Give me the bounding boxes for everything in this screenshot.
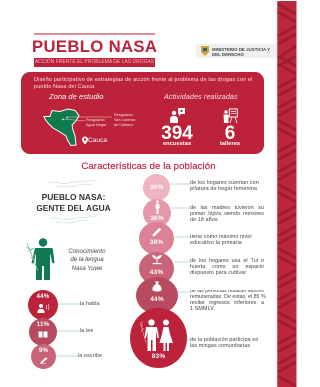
text: 38%: tiene como máximo nivel (190, 234, 252, 240)
ministry name: MINISTERIO DE JUSTICIA Y (212, 46, 270, 52)
label: San Lorenzo (114, 112, 136, 126)
heading: people of water: GENTE DEL AGUA (36, 203, 111, 213)
icon: money bag (152, 282, 162, 292)
circle: female-headed 30% (143, 174, 170, 201)
subtitle band: ACCIÓN FRENTE EL PROBLEMA DE LAS DROGAS (35, 59, 154, 65)
workshops label: talleres (220, 140, 240, 146)
icon: pencil (40, 357, 48, 364)
map of Cauca (43, 108, 80, 146)
text: 43% (190, 258, 264, 270)
label: Agua Negra (86, 118, 106, 127)
circle: primary education 38% (139, 222, 174, 255)
circle: speaks 44% (28, 290, 58, 320)
icon: book (38, 332, 48, 338)
text: 43%: huerta como un espacio (190, 264, 264, 270)
text: 44% continued: recibe ingresos inferiores a (190, 300, 264, 306)
value: 44% (150, 296, 164, 303)
heading: study zone: Zona de estudio (49, 92, 103, 101)
text: 43%: de los hogares usa el Tul o (190, 258, 264, 264)
text: 83%: de la población participa en (190, 337, 258, 343)
label: San Lorenzo: San Lorenzo (114, 118, 136, 122)
text: 30%: jefatura de hogar femenina (190, 186, 257, 192)
text: 38% (190, 234, 252, 246)
label: Agua Negra: Agua Negra (86, 123, 106, 127)
label: Agua Negra: Resguardo (86, 118, 105, 122)
text: 36%: primer hijo/a siendo menores (190, 211, 264, 217)
text: 36% continued: de 18 años (190, 217, 218, 223)
label: San Lorenzo: de Caldono (114, 122, 133, 126)
text: 30% (190, 180, 259, 192)
circle: young mothers 36% (143, 199, 171, 227)
label: Cauca: Cauca (88, 136, 107, 144)
language knowledge heading: de la lengua (70, 256, 104, 263)
leader lines (63, 116, 112, 122)
title: PUEBLO NASA (32, 37, 157, 56)
text: 83% (190, 337, 258, 349)
value: 43% (150, 269, 163, 276)
ministry logo (196, 44, 277, 58)
stat: 6 workshops: 6 (225, 123, 235, 144)
icon: pencil (152, 228, 161, 236)
stat: 6 workshops (220, 123, 240, 146)
circle: reads 11% (29, 318, 57, 346)
text: 38%: educativo la primaria (190, 240, 242, 246)
section heading: Características de la población (81, 161, 216, 172)
stat: 394 surveys: 394 (161, 123, 193, 144)
icon: workshop (224, 108, 238, 123)
icon: survey (170, 108, 185, 123)
subtitle band (34, 58, 155, 67)
panel description: Diseño participativo de estrategias de acción frente al problema de las drogas con el (34, 77, 253, 83)
panel description: pueblo Nasa del Cauca (34, 84, 94, 90)
circle: female-headed 30%: 30% (150, 184, 163, 191)
icon: coat of arms (201, 46, 209, 56)
value: 36% (150, 214, 164, 222)
value: 9% (39, 346, 48, 354)
text: 83%: las mingas comunitarias (190, 343, 250, 349)
language knowledge heading (68, 248, 106, 272)
circle: writes 9% (31, 344, 56, 369)
language knowledge heading: Nasa Yuwe (72, 265, 102, 272)
label: writes: la escribe (78, 353, 102, 359)
value: 38% (150, 239, 163, 246)
heading: people of water (36, 192, 111, 213)
ministry name: DEL DERECHO (212, 52, 244, 57)
label: San Lorenzo: Resguardo (114, 112, 133, 116)
icon: pregnant woman (155, 200, 160, 214)
icon: sprout (152, 255, 162, 264)
text: 36%: de las madres tuvieron su (190, 205, 264, 211)
surveys label: encuestas (163, 140, 191, 146)
text: 30%: de los hogares cuentan con (190, 180, 259, 186)
value: 44% (36, 293, 49, 300)
text: 44%: remuneradas. De estas, el 85 % (190, 294, 266, 300)
heading: activities: Actividades realizadas (164, 92, 238, 101)
panel description (34, 77, 253, 90)
icon: couple (140, 319, 173, 351)
text: 36% (190, 205, 264, 217)
ministry name (212, 46, 270, 57)
label: speaks: la habla (80, 301, 100, 307)
icon: location pin (82, 136, 88, 144)
label: reads: la lee (80, 328, 94, 334)
icon: speaking person (38, 304, 50, 313)
title rule (34, 33, 155, 34)
value: 83% (152, 353, 165, 360)
heading: people of water: PUEBLO NASA: (42, 192, 105, 202)
circle: income 44% (136, 277, 178, 314)
circle: Tul 43% (139, 252, 174, 285)
circle: mingas 83% (130, 308, 187, 368)
text: 44% end: 1 SMMLV. (190, 306, 215, 312)
panel: summary (21, 72, 264, 154)
icon: Nasa person with staff (26, 238, 54, 280)
text: 43% continued: dispuesto para cultivar (190, 270, 246, 276)
value: 11% (37, 321, 49, 328)
language knowledge heading: Conocimiento (68, 248, 106, 255)
